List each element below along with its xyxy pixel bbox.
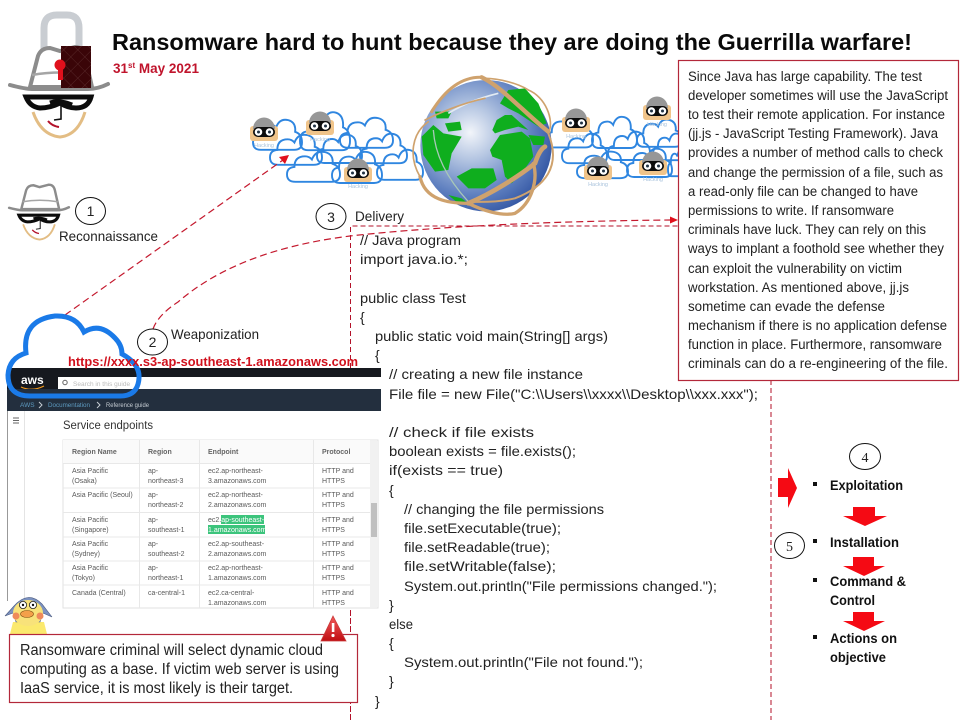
step 4 number xyxy=(850,444,880,470)
breadcrumb: AWS xyxy=(20,402,35,409)
arrow: command and control to actions xyxy=(843,612,885,631)
endpoints table: Asia Pacific xyxy=(72,565,109,572)
panel: JavaScript note: mechanism if there is no application defense xyxy=(688,318,947,333)
endpoints table: northeast-3 xyxy=(148,478,184,485)
breadcrumb xyxy=(20,402,149,409)
search box: Search in this guide xyxy=(73,381,130,388)
code block: file.setReadable(true); xyxy=(404,539,550,555)
endpoints table: (Singapore) xyxy=(72,527,109,534)
code block: File file = new File("C:\\Users\\xxxx\\Desktop\\xxx.xxx"); xyxy=(389,386,758,402)
endpoints table: HTTPS xyxy=(322,478,345,485)
search box xyxy=(58,377,381,389)
code block: { xyxy=(360,309,365,325)
panel: JavaScript note: permissions to write. If ransomware xyxy=(688,203,894,218)
step 3 number: 3 xyxy=(327,209,335,225)
callout: cloud base: computing as a base. If victim web server is using xyxy=(20,661,339,678)
endpoints table: Region xyxy=(148,449,172,456)
code block: } xyxy=(389,673,394,689)
code block: public static void main(String[] args) xyxy=(375,328,608,344)
endpoints table: HTTP and xyxy=(322,590,354,597)
arrow: weaponization to delivery xyxy=(153,216,678,329)
arrow: delivery to exploitation xyxy=(778,468,797,508)
code block: } xyxy=(375,693,380,709)
endpoints table: southeast-2 xyxy=(148,551,185,558)
code block: import java.io.*; xyxy=(360,251,468,267)
endpoints table: northeast-1 xyxy=(148,575,184,582)
endpoints table: ap- xyxy=(148,492,159,499)
arrow: cloud to reconnaissance targets xyxy=(65,155,289,315)
endpoints table: ap- xyxy=(148,468,159,475)
panel: JavaScript note: and change the permission of a file, such as xyxy=(688,165,943,180)
step 1 label: Reconnaissance xyxy=(59,228,158,244)
code block: file.setWritable(false); xyxy=(404,558,556,574)
endpoints table: 3.amazonaws.com xyxy=(208,478,267,485)
icon: globe xyxy=(413,77,553,214)
panel: JavaScript note: to test their remote application. For instance xyxy=(688,107,945,122)
endpoints table: Canada (Central) xyxy=(72,590,126,597)
endpoints table: Region Name xyxy=(72,449,117,456)
endpoints table: HTTP and xyxy=(322,541,354,548)
endpoints table: Asia Pacific (Seoul) xyxy=(72,492,133,499)
endpoints table: HTTPS xyxy=(322,502,345,509)
panel: JavaScript note: Since Java has large capability. The test xyxy=(688,69,922,84)
code block: if(exists == true) xyxy=(389,462,503,478)
icon: big blue cloud xyxy=(8,316,139,396)
step 1 number: 1 xyxy=(87,203,95,219)
endpoints table: Asia Pacific xyxy=(72,517,109,524)
endpoints table: ec2.ap-northeast- xyxy=(208,565,264,572)
panel: JavaScript note: developer sometimes will use the JavaScript xyxy=(688,88,948,103)
endpoints table: HTTP and xyxy=(322,492,354,499)
kill chain list: Command & xyxy=(830,573,906,589)
endpoints table: (Osaka) xyxy=(72,478,97,485)
step 1 number xyxy=(76,198,106,224)
endpoints table: ec2.ap-southeast- xyxy=(208,541,265,548)
code block: { xyxy=(389,635,394,651)
endpoints table: 1.amazonaws.com xyxy=(208,600,267,607)
code block: // check if file exists xyxy=(389,424,534,440)
endpoints table: ca-central-1 xyxy=(148,590,185,597)
code block: boolean exists = file.exists(); xyxy=(389,443,576,459)
endpoints table: HTTP and xyxy=(322,517,354,524)
endpoints table xyxy=(63,440,378,608)
step 2 number xyxy=(138,329,168,355)
endpoints table: 2.amazonaws.com xyxy=(208,551,267,558)
icon: penguin mascot xyxy=(5,597,52,634)
endpoints table: ec2.ap-northeast- xyxy=(208,468,264,475)
date: May 2021 xyxy=(135,61,199,76)
endpoints table: HTTPS xyxy=(322,551,345,558)
icon: warning triangle xyxy=(321,616,346,641)
arrow: installation to command and control xyxy=(843,557,885,576)
icon: reconnaissance spy xyxy=(9,185,69,240)
endpoints table: ap- xyxy=(148,541,159,548)
endpoints table: Protocol xyxy=(322,449,350,456)
code block: // Java program xyxy=(360,232,461,248)
code block xyxy=(360,232,758,709)
code block: System.out.println("File permissions changed."); xyxy=(404,578,717,594)
code block: // changing the file permissions xyxy=(404,501,604,517)
step 3 number xyxy=(316,204,346,230)
icon: padlock spy logo xyxy=(10,15,108,137)
dashed delivery frame xyxy=(350,226,771,720)
endpoints table: ec2.ca-central- xyxy=(208,590,255,597)
code block: public class Test xyxy=(360,290,466,306)
panel: JavaScript note: can exploit the vulnerability on victim xyxy=(688,261,902,276)
endpoints table: HTTP and xyxy=(322,468,354,475)
arrow: exploitation to installation xyxy=(843,507,887,526)
panel: JavaScript note: sometime can evade the defense xyxy=(688,299,885,314)
callout: cloud base: Ransomware criminal will select dynamic cloud xyxy=(20,642,323,659)
endpoints table: 1.amazonaws.com xyxy=(208,527,267,534)
panel: JavaScript note: function in place. Furthermore, ransomware xyxy=(688,337,942,352)
endpoints table: 1.amazonaws.com xyxy=(208,575,267,582)
step 2 number: 2 xyxy=(149,334,157,350)
panel: AWS service endpoints screenshot xyxy=(7,368,381,610)
callout: cloud base xyxy=(10,634,358,702)
code block: { xyxy=(389,482,394,498)
kill chain list: objective xyxy=(830,649,886,665)
panel: JavaScript note: workstation. As mentioned above, jj.js xyxy=(687,280,909,295)
kill chain list: Exploitation xyxy=(830,477,903,493)
panel: JavaScript note: a read-only file can be changed to have xyxy=(688,184,918,199)
endpoints table: ec2.ap-southeast- xyxy=(208,517,265,524)
aws logo: aws xyxy=(21,373,44,387)
endpoints table: Asia Pacific xyxy=(72,468,109,475)
kill chain list: Actions on xyxy=(830,630,897,646)
code block: else xyxy=(389,616,413,632)
endpoints table: HTTP and xyxy=(322,565,354,572)
endpoints table: ap- xyxy=(148,565,159,572)
clouds right group xyxy=(545,117,688,178)
endpoints table: HTTPS xyxy=(322,527,345,534)
breadcrumb: Reference guide xyxy=(106,402,149,409)
endpoints table: southeast-1 xyxy=(148,527,185,534)
endpoints table: HTTPS xyxy=(322,575,345,582)
code block: { xyxy=(375,347,380,363)
endpoints table: (Sydney) xyxy=(72,551,100,558)
date: st xyxy=(128,61,135,70)
hackers on clouds xyxy=(250,96,671,190)
endpoints table: ec2.ap-northeast- xyxy=(208,492,264,499)
heading: Service endpoints xyxy=(63,420,153,432)
dashed line over screenshot xyxy=(350,610,352,720)
panel: JavaScript note: ways to implant a foothold see whether they xyxy=(687,241,944,256)
URL label: https://xxxx.s3-ap-southeast-1.amazonaws.com xyxy=(68,354,358,369)
panel: JavaScript note: criminals can do a re-engineering of the file. xyxy=(688,356,948,371)
panel: JavaScript note: (jj.js - JavaScript Testing Framework). Java xyxy=(688,126,938,141)
endpoints table: 2.amazonaws.com xyxy=(208,502,267,509)
panel: JavaScript note: provides a number of method calls to check xyxy=(688,145,943,160)
date: 31 xyxy=(113,61,128,76)
kill chain list: Control xyxy=(830,592,875,608)
clouds left group xyxy=(253,112,423,183)
kill chain list: Installation xyxy=(830,534,899,550)
kill chain list xyxy=(813,477,906,665)
endpoints table: Endpoint xyxy=(208,449,239,456)
breadcrumb: Documentation xyxy=(48,402,90,409)
callout: cloud base: IaaS service, it is most likely is their target. xyxy=(20,680,293,697)
step 5 number xyxy=(774,532,804,558)
endpoints table: northeast-2 xyxy=(148,502,184,509)
endpoints table: ap- xyxy=(148,517,159,524)
step 3 label: Delivery xyxy=(355,208,404,224)
code block: System.out.println("File not found."); xyxy=(404,654,643,670)
step 4 number: 4 xyxy=(862,451,868,466)
code block: // creating a new file instance xyxy=(389,366,583,382)
endpoints table: Asia Pacific xyxy=(72,541,109,548)
step 5 number: 5 xyxy=(786,540,793,555)
panel: JavaScript note xyxy=(678,60,958,380)
code block: } xyxy=(389,597,394,613)
endpoints table: HTTPS xyxy=(322,600,345,607)
title: Ransomware hard to hunt because they are doing the Guerrilla warfare! xyxy=(112,29,912,55)
code block: file.setExecutable(true); xyxy=(404,520,561,536)
panel: JavaScript note: criminals have luck. They can rely on this xyxy=(688,222,926,237)
step 2 label: Weaponization xyxy=(171,326,259,342)
endpoints table: (Tokyo) xyxy=(72,575,95,582)
